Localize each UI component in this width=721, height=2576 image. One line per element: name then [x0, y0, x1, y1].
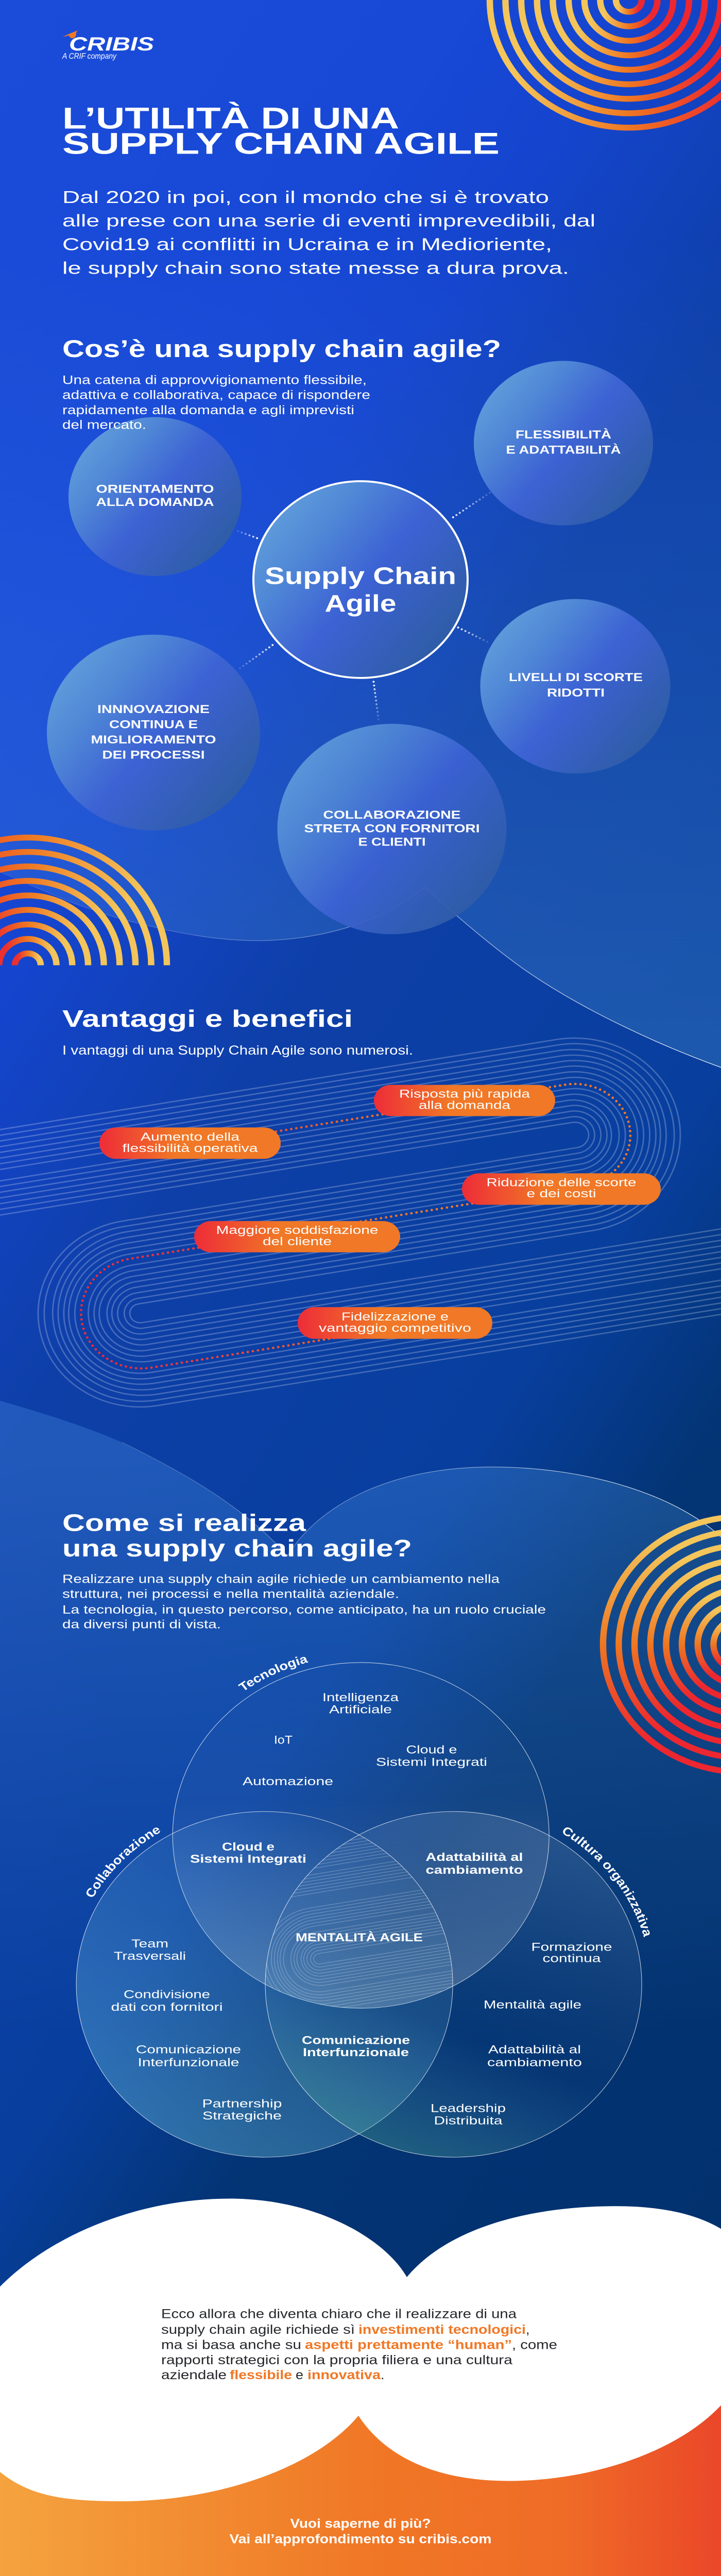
heading: come si realizza: Come si realizza [62, 1510, 306, 1536]
intersection: comunicazione interfunzionale [302, 2033, 410, 2059]
background cloud: upper section [0, 0, 721, 1067]
title [62, 101, 500, 161]
paragraph: definizione: del mercato. [62, 418, 146, 432]
closing paragraph [161, 2308, 557, 2382]
intersection: cloud e sistemi integrati: Sistemi Integrati [190, 1853, 306, 1866]
heading: Cos'è una supply chain agile: Cos’è una supply chain agile? [62, 336, 501, 363]
circle: innovazione continua: DEI PROCESSI [102, 748, 205, 761]
background cloud outline: upper section [0, 872, 721, 1067]
items: cultura organizzativa: Adattabilità al [488, 2043, 581, 2056]
intersection: adattabilità al cambiamento: Adattabilità al [425, 1851, 523, 1863]
serpentine track lines [0, 1038, 721, 1407]
items: collaborazione: Comunicazione [136, 2043, 241, 2056]
heading: vantaggi e benefici: Vantaggi e benefici [62, 1006, 353, 1032]
items: cultura organizzativa: continua [543, 1952, 601, 1964]
items: tecnologia: IoT [274, 1733, 293, 1746]
diagram: supply chain agile hub [47, 361, 671, 934]
intro paragraph: Covid19 ai conflitti in Ucraina e in Medioriente, [62, 235, 552, 254]
items: tecnologia: Intelligenza [322, 1691, 399, 1704]
curved label: cultura organizzativa: Cultura organizzativa [563, 1827, 650, 1937]
closing paragraph: Ecco allora che diventa chiaro che il realizzare di una [161, 2308, 517, 2321]
intersection: adattabilità al cambiamento: cambiamento [425, 1863, 523, 1876]
circle: flessibilità e adattabilità [474, 361, 653, 526]
pill: maggiore soddisfazione: Maggiore soddisfazione [216, 1224, 378, 1236]
background cloud: lower section [0, 1401, 721, 2128]
closing paragraph: aziendale [161, 2368, 227, 2382]
decorative rings: right [603, 1517, 721, 1772]
circle: innovazione continua [47, 635, 260, 831]
call to action [230, 2517, 491, 2546]
pill: maggiore soddisfazione: del cliente [263, 1235, 332, 1248]
paragraph: definizione: adattiva e collaborativa, capace di rispondere [62, 388, 370, 402]
intro paragraph: alle prese con una serie di eventi imprevedibili, dal [62, 212, 595, 230]
pill: risposta più rapida [374, 1085, 555, 1116]
title: L’UTILITÀ DI UNA [62, 101, 399, 135]
pill: riduzione delle scorte: Riduzione delle scorte [486, 1176, 636, 1189]
pill: risposta più rapida: alla domanda [419, 1098, 510, 1111]
items: collaborazione: Interfunzionale [138, 2056, 239, 2069]
venn diagram [76, 1656, 650, 2158]
circle: collaborazione stretta: COLLABORAZIONE [323, 808, 461, 821]
pill: fidelizzazione [298, 1307, 492, 1339]
closing paragraph: investimenti tecnologici [358, 2323, 526, 2337]
centre: mentalità agile: MENTALITÀ AGILE [296, 1930, 423, 1944]
closing paragraph: innovativa [307, 2368, 381, 2382]
paragraph: come si realizza: da diversi punti di vista. [62, 1618, 221, 1631]
items: cultura organizzativa: Distribuita [434, 2114, 503, 2127]
paragraph: definizione: Una catena di approvvigionamento flessibile, [62, 373, 367, 387]
pill: maggiore soddisfazione [194, 1221, 400, 1252]
pill: fidelizzazione: vantaggio competitivo [319, 1321, 471, 1334]
heading: come si realizza [62, 1510, 412, 1562]
paragraph: come si realizza: Realizzare una supply chain agile richiede un cambiamento nella [62, 1572, 500, 1586]
intro paragraph [62, 188, 595, 278]
items: cultura organizzativa: cambiamento [487, 2056, 582, 2069]
items: cultura organizzativa: Leadership [431, 2102, 506, 2114]
intro paragraph: Dal 2020 in poi, con il mondo che si è trovato [62, 188, 549, 207]
circle: flessibilità e adattabilità: E ADATTABILITÀ [506, 443, 621, 456]
circle: supply chain agile [253, 481, 468, 678]
logo: CRIBIS: CRIBIS [69, 34, 154, 55]
circle: orientamento alla domanda [68, 417, 242, 576]
circle: flessibilità e adattabilità: FLESSIBILITÀ [516, 428, 611, 441]
dotted route through the benefits [81, 1084, 630, 1368]
decorative rings: top right [490, 0, 721, 128]
heading: come si realizza: una supply chain agile? [62, 1536, 412, 1562]
intersection: comunicazione interfunzionale: Interfunzionale [303, 2046, 409, 2059]
paragraph: come si realizza: La tecnologia, in questo percorso, come anticipato, ha un ruolo cruciale [62, 1603, 546, 1617]
pill: fidelizzazione: Fidelizzazione e [341, 1310, 449, 1323]
circle: collaborazione stretta: E CLIENTI [358, 835, 425, 848]
call to action: Vai all’approfondimento su cribis.com [230, 2533, 491, 2546]
items: collaborazione: Partnership [202, 2097, 282, 2110]
pill: riduzione delle scorte [462, 1173, 661, 1205]
closing paragraph: , come [512, 2338, 557, 2352]
circle: livelli di scorte ridotti [480, 599, 671, 773]
circle: collaborazione stretta [277, 724, 507, 934]
items: tecnologia: Sistemi Integrati [376, 1755, 487, 1768]
intersection: comunicazione interfunzionale: Comunicazione [302, 2033, 410, 2046]
items: collaborazione: Strategiche [202, 2109, 282, 2122]
venn centre track pattern [266, 1838, 453, 2007]
closing paragraph: ma si basa anche su [161, 2338, 301, 2352]
logo: CRIBIS: A CRIF company [62, 52, 117, 61]
items: collaborazione [111, 1937, 282, 2122]
closing paragraph: flessibile [230, 2368, 292, 2382]
items: cultura organizzativa: Mentalità agile [484, 1998, 581, 2011]
pill: aumento della flessibilità: Aumento della [141, 1130, 239, 1143]
items: cultura organizzativa: Formazione [531, 1940, 612, 1953]
closing paragraph: e [296, 2368, 303, 2382]
curved label: tecnologia: Tecnologia [238, 1656, 308, 1690]
decorative rings: lower left [0, 835, 170, 965]
intersection: cloud e sistemi integrati: Cloud e [222, 1840, 274, 1853]
circle: supply chain agile: Agile [324, 591, 396, 617]
title: SUPPLY CHAIN AGILE [62, 127, 500, 161]
closing paragraph: , [526, 2323, 530, 2337]
footer orange band [0, 2365, 721, 2576]
circle: orientamento alla domanda: ORIENTAMENTO [96, 482, 214, 495]
paragraph: definizione [62, 373, 370, 432]
circle: supply chain agile: Supply Chain [265, 563, 456, 589]
items: collaborazione: Condivisione [124, 1988, 210, 2001]
dotted connector: scorte [457, 627, 487, 642]
closing paragraph: . [381, 2368, 385, 2382]
call to action: Vuoi saperne di più? [290, 2517, 431, 2531]
closing paragraph: rapporti strategici con la propria filiera e una cultura [161, 2353, 513, 2367]
background cloud outline: lower section [122, 1443, 721, 1556]
closing paragraph: supply chain agile richiede sì [161, 2323, 355, 2337]
intersection: cloud e sistemi integrati [190, 1840, 306, 1866]
dotted connector: orientamento [238, 531, 259, 539]
dotted connector: innovazione [240, 643, 274, 668]
circle: collaborazione stretta: STRETA CON FORNITORI [304, 822, 479, 835]
closing paragraph: aspetti prettamente “human” [305, 2338, 512, 2352]
circle: orientamento alla domanda: ALLA DOMANDA [96, 496, 214, 509]
pill: riduzione delle scorte: e dei costi [526, 1187, 596, 1200]
curved label: collaborazione: Collaborazione [87, 1827, 160, 1897]
pill: risposta più rapida: Risposta più rapida [399, 1087, 530, 1100]
intersection: adattabilità al cambiamento [425, 1851, 523, 1876]
circle: innovazione continua: INNNOVAZIONE [97, 703, 210, 716]
items: tecnologia [243, 1691, 487, 1788]
dotted connector: flessibilità [450, 493, 490, 519]
venn circle: cultura organizzativa [265, 1811, 642, 2157]
circle: innovazione continua: MIGLIORAMENTO [91, 733, 216, 746]
items: cultura organizzativa [431, 1940, 612, 2127]
pill: aumento della flessibilità [99, 1127, 281, 1159]
circle: innovazione continua: CONTINUA E [109, 718, 198, 731]
logo: CRIBIS [62, 30, 154, 61]
venn circle: collaborazione [76, 1811, 453, 2157]
dotted connector: collaborazione [373, 680, 379, 719]
items: tecnologia: Artificiale [329, 1703, 392, 1716]
circle: livelli di scorte ridotti: RIDOTTI [547, 686, 605, 699]
items: tecnologia: Automazione [243, 1775, 333, 1788]
paragraph: come si realizza [62, 1572, 546, 1631]
circle: livelli di scorte ridotti: LIVELLI DI SCORTE [509, 671, 643, 684]
white cloud [0, 2198, 721, 2501]
items: collaborazione: Trasversali [114, 1950, 186, 1962]
text: vantaggi intro: I vantaggi di una Supply Chain Agile sono numerosi. [62, 1044, 413, 1058]
venn circle: tecnologia [173, 1663, 549, 2008]
paragraph: come si realizza: struttura, nei processi e nella mentalità aziendale. [62, 1588, 399, 1601]
items: collaborazione: Team [131, 1937, 168, 1950]
intro paragraph: le supply chain sono state messe a dura prova. [62, 259, 569, 278]
items: tecnologia: Cloud e [406, 1743, 457, 1756]
pill: aumento della flessibilità: flessibilità operativa [123, 1142, 258, 1155]
paragraph: definizione: rapidamente alla domanda e agli imprevisti [62, 403, 354, 417]
items: collaborazione: dati con fornitori [111, 2001, 222, 2013]
